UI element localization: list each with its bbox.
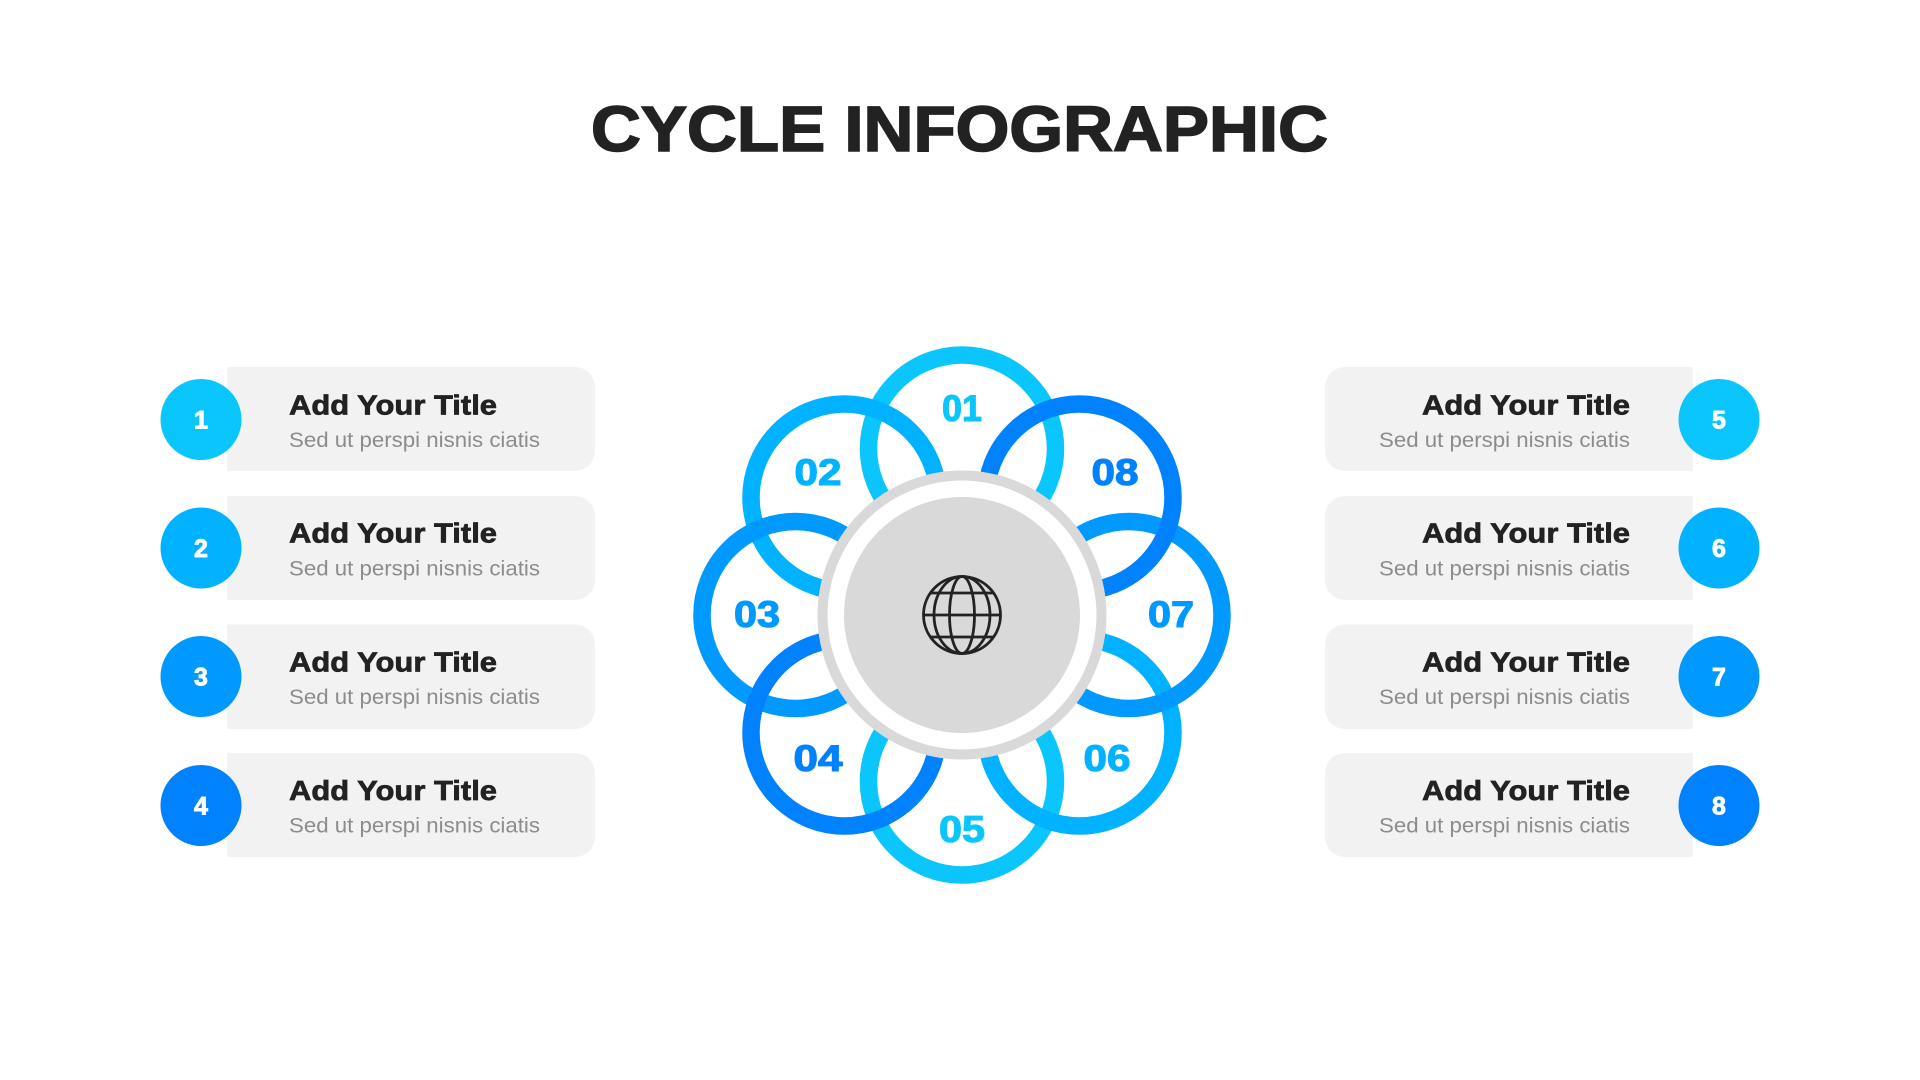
icon: globe [924, 576, 1000, 654]
panel: item 7: 7 [1712, 664, 1726, 692]
petal ring 08 [986, 404, 1173, 591]
number 07: 07 [1148, 594, 1194, 635]
panel: item 8 [1325, 753, 1760, 857]
panel: item 5: 5 [1712, 406, 1726, 434]
panel: item 2: Add Your Title [289, 518, 497, 548]
panel: item 7 [1325, 624, 1760, 729]
number 03: 03 [734, 594, 780, 635]
panel: item 2: Sed ut perspi nisnis ciatis [289, 558, 540, 580]
petal ring 07 [1035, 522, 1222, 708]
panel: item 5 [1325, 367, 1760, 471]
number 05: 05 [939, 809, 985, 850]
panel: item 8: Add Your Title [1422, 775, 1630, 806]
panel: item 5: Sed ut perspi nisnis ciatis [1379, 429, 1630, 452]
panel: item 2: 2 [194, 535, 208, 563]
petal ring 05 [868, 688, 1056, 875]
panel: item 4 [160, 753, 595, 857]
petal ring 06 [986, 639, 1173, 826]
center hub outer ring [822, 476, 1102, 754]
panel: item 8: Sed ut perspi nisnis ciatis [1379, 814, 1630, 838]
panel: item 6: Add Your Title [1422, 518, 1630, 548]
panel: item 6 [1325, 496, 1760, 600]
number 08: 08 [1092, 452, 1138, 493]
panel: item 6: Sed ut perspi nisnis ciatis [1379, 558, 1630, 580]
panel: item 3: Add Your Title [289, 646, 497, 678]
cycle diagram [702, 355, 1222, 875]
panel: item 3: 3 [194, 664, 208, 692]
panel: item 1 [160, 367, 595, 471]
petal ring 03 [702, 522, 889, 708]
panel: item 1: Sed ut perspi nisnis ciatis [289, 429, 540, 452]
panel: item 3: Sed ut perspi nisnis ciatis [289, 686, 540, 709]
panel: item 6: 6 [1712, 535, 1726, 563]
panel: item 1: Add Your Title [289, 390, 497, 420]
number 06: 06 [1084, 738, 1130, 779]
panel: item 4: Sed ut perspi nisnis ciatis [289, 814, 540, 838]
panel: item 4: Add Your Title [289, 775, 497, 806]
petal ring 04 [751, 639, 938, 826]
title: CYCLE INFOGRAPHIC [591, 93, 1328, 165]
petal ring 02 [751, 404, 938, 591]
panel: item 7: Sed ut perspi nisnis ciatis [1379, 686, 1630, 709]
number 04: 04 [794, 738, 843, 779]
panel: item 2 [160, 496, 595, 600]
petal ring 01 [868, 355, 1056, 542]
panel: item 5: Add Your Title [1422, 390, 1630, 420]
panel: item 1: 1 [194, 406, 208, 434]
number 01: 01 [942, 388, 982, 429]
panel: item 3 [160, 624, 595, 729]
panel: item 7: Add Your Title [1422, 646, 1630, 678]
number 02: 02 [794, 452, 842, 493]
panel: item 4: 4 [194, 792, 208, 820]
panel: item 8: 8 [1712, 792, 1726, 820]
center hub disk [844, 497, 1080, 733]
